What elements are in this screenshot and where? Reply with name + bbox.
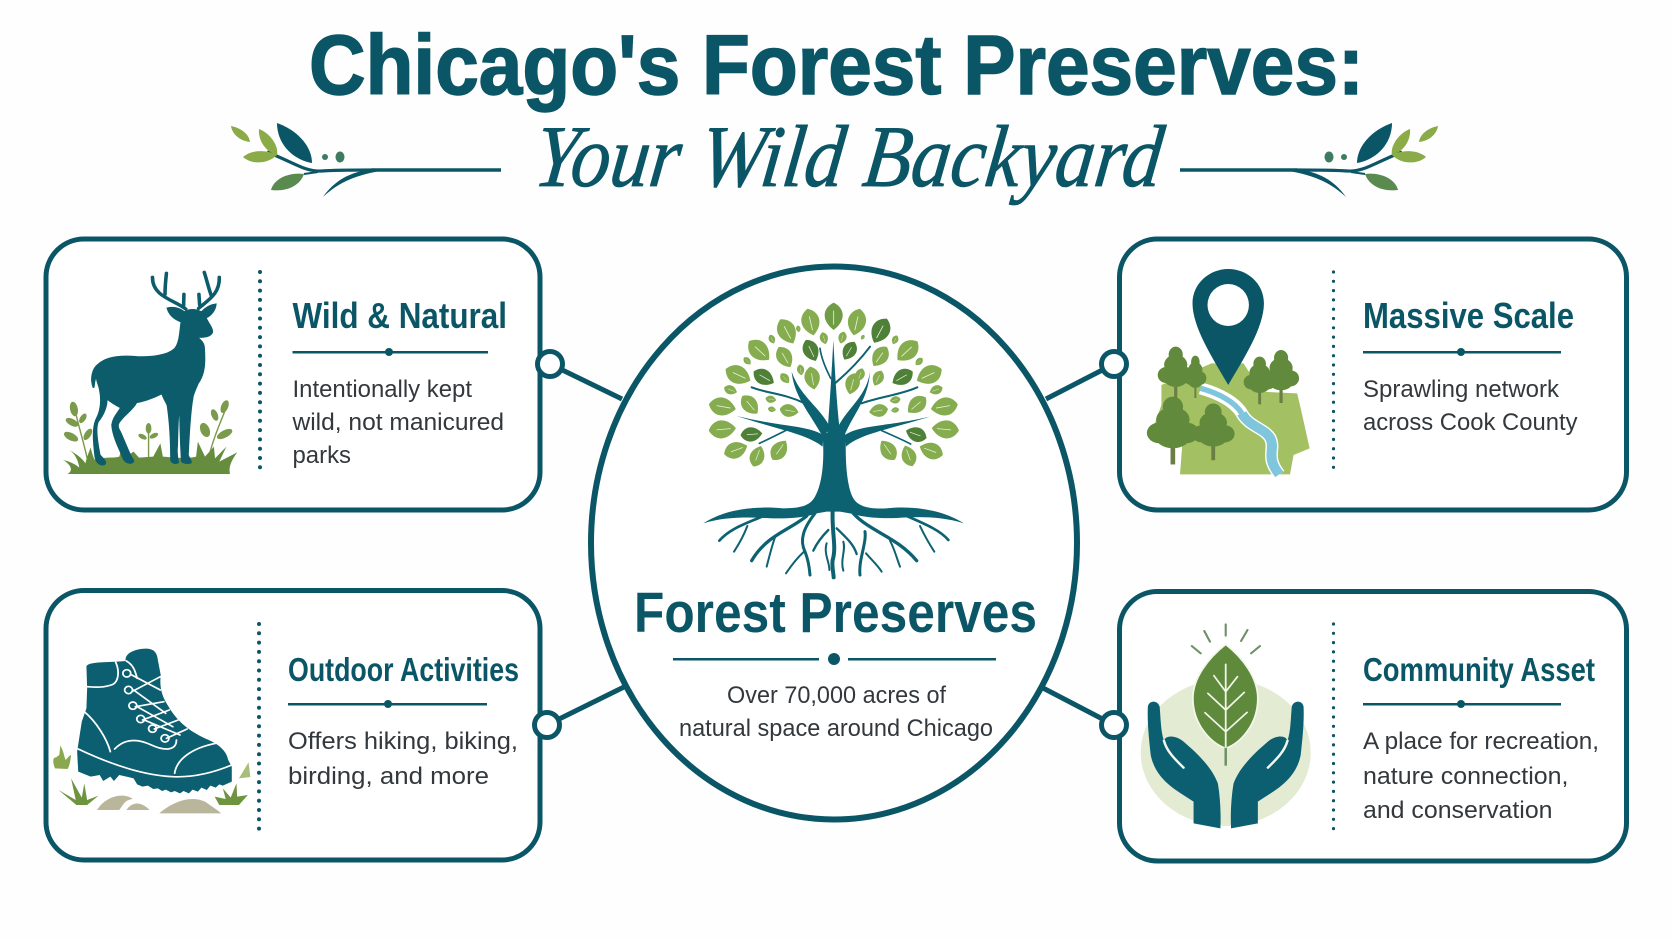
description: Sprawling network	[1363, 376, 1560, 403]
connector lines	[547, 364, 1114, 725]
connector nodes	[534, 352, 1126, 738]
description: and conservation	[1363, 797, 1552, 824]
panel: outdoor activities	[46, 590, 540, 860]
description: birding, and more	[288, 763, 489, 790]
heading: Massive Scale	[1363, 295, 1574, 336]
left branch ornament	[231, 123, 501, 197]
description: Over 70,000 acres of	[727, 682, 946, 709]
description: across Cook County	[1363, 409, 1578, 436]
description: natural space around Chicago	[679, 715, 993, 742]
heading: Forest Preserves	[634, 581, 1037, 645]
panel: wild and natural	[46, 239, 540, 510]
divider	[1332, 272, 1335, 476]
rule	[292, 348, 488, 356]
heading: Outdoor Activities	[288, 651, 519, 688]
icon: deer	[62, 272, 237, 474]
icon: map with pin	[1147, 269, 1310, 474]
panel: central forest preserves circle	[591, 266, 1077, 820]
description	[288, 728, 518, 790]
divider	[257, 624, 261, 829]
description: wild, not manicured	[291, 409, 504, 436]
description	[1363, 728, 1599, 824]
heading: Wild & Natural	[292, 295, 507, 336]
panel: massive scale	[1120, 239, 1626, 510]
description	[679, 682, 993, 742]
heading: Community Asset	[1363, 651, 1595, 688]
divider	[258, 272, 262, 476]
rule	[1363, 348, 1561, 356]
description: Offers hiking, biking,	[288, 728, 518, 755]
description: Intentionally kept	[292, 376, 472, 403]
title	[309, 18, 1364, 206]
rule	[673, 653, 996, 665]
right branch ornament	[1180, 123, 1438, 197]
title: Chicago's Forest Preserves:	[309, 18, 1364, 112]
icon: hiking boot	[53, 649, 250, 813]
subtitle: Your Wild Backyard	[530, 108, 1169, 206]
description: A place for recreation,	[1363, 728, 1599, 755]
icon: hands holding leaf	[1141, 624, 1311, 828]
panel: community asset	[1120, 592, 1626, 861]
description: parks	[292, 442, 351, 469]
description	[1363, 376, 1578, 436]
rule	[1363, 700, 1561, 708]
icon: tree with roots	[703, 303, 964, 577]
description: nature connection,	[1363, 763, 1568, 790]
description	[291, 376, 504, 469]
divider	[1332, 624, 1335, 829]
rule	[288, 700, 487, 708]
